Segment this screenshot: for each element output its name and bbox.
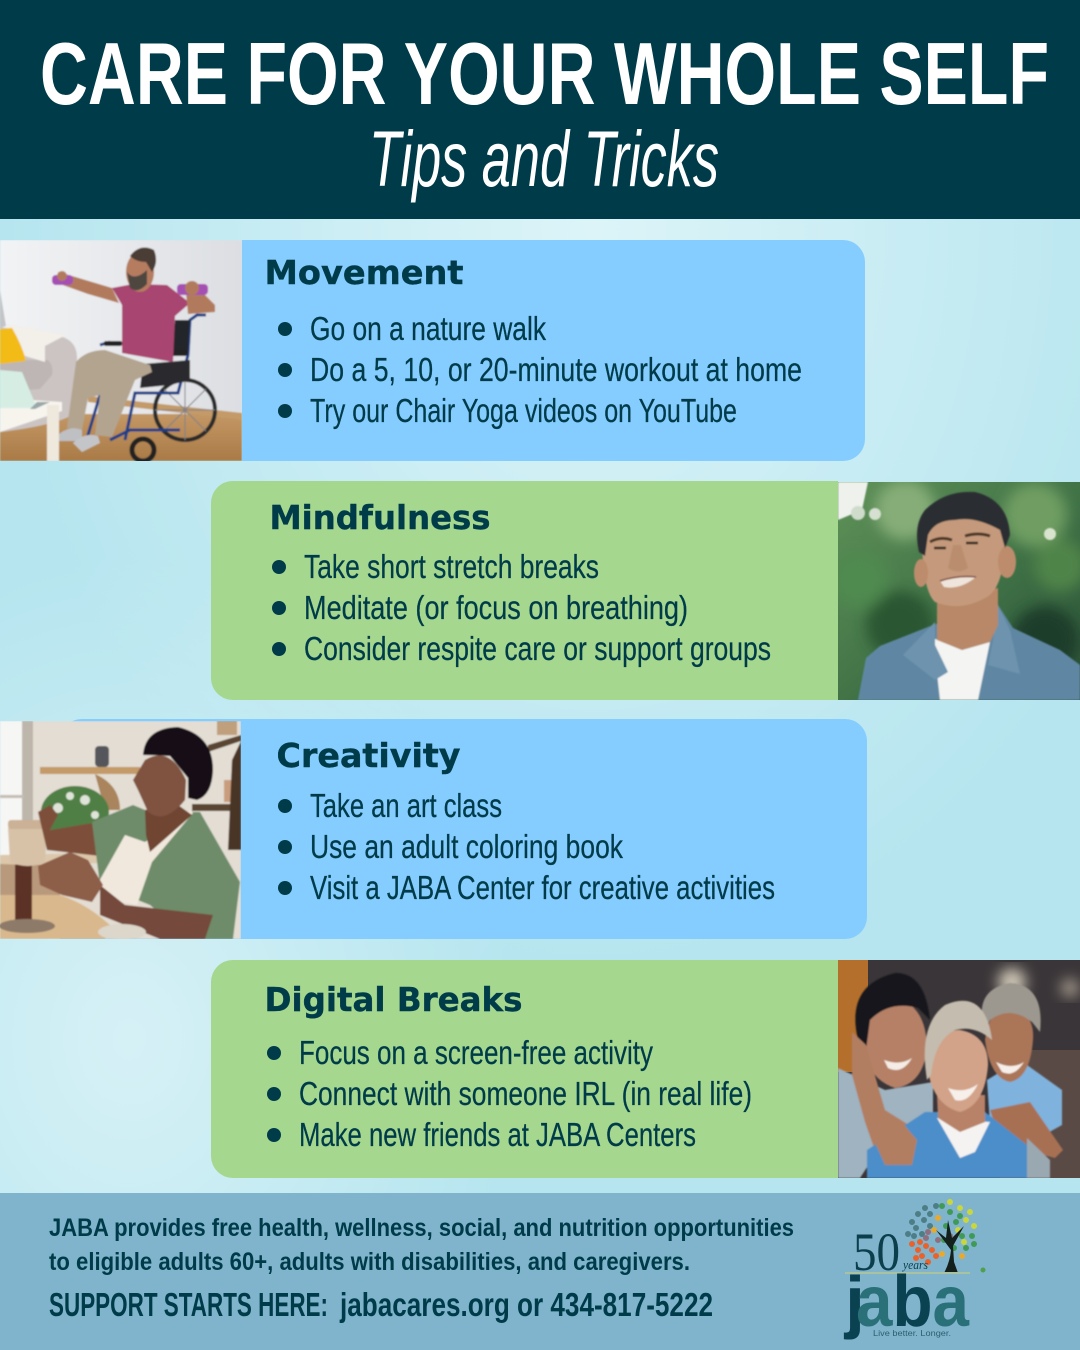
bench — [0, 895, 115, 939]
footer description: to eligible adults 60+, adults with disabilities, and caregivers. — [49, 1248, 690, 1276]
bullet list: Try our Chair Yoga videos on YouTube — [310, 392, 737, 429]
wordmark: jaba: aba — [856, 1262, 970, 1342]
contact line — [49, 1286, 713, 1323]
logo: JABA 50 years — [843, 1202, 986, 1342]
heading: Creativity — [276, 736, 460, 775]
footer description — [49, 1214, 794, 1276]
photo: three smiling women — [838, 960, 1080, 1178]
bullet list: Take an art class — [310, 787, 502, 824]
bullet list — [278, 310, 802, 429]
subtitle: Tips and Tricks — [369, 114, 719, 203]
right woman — [986, 1064, 1063, 1132]
apron — [97, 810, 193, 905]
arms — [58, 272, 119, 303]
bullet list: Go on a nature walk — [310, 310, 546, 347]
back arm and hand — [38, 805, 100, 856]
dumbbells — [52, 275, 73, 285]
heading: Mindfulness — [270, 498, 490, 537]
bullet list — [267, 1034, 752, 1153]
bullet list: Consider respite care or support groups — [304, 630, 771, 667]
bullet list: Visit a JABA Center for creative activities — [310, 869, 775, 906]
photo: smiling older man outdoors — [832, 480, 1080, 700]
sofa — [0, 327, 77, 432]
bullet list: Take short stretch breaks — [304, 548, 599, 585]
photo: man exercising in wheelchair — [0, 240, 242, 461]
left woman — [838, 1068, 933, 1178]
front hand — [38, 852, 103, 902]
plant — [41, 786, 109, 838]
bullet list — [272, 548, 771, 667]
panel: digital breaks — [211, 960, 1080, 1178]
bullet list: Use an adult coloring book — [310, 828, 623, 865]
panel: mindfulness — [211, 480, 1080, 700]
arm — [100, 885, 213, 939]
hair — [143, 727, 213, 800]
footer description: JABA provides free health, wellness, social, and nutrition opportunities — [49, 1214, 794, 1242]
panel: creativity — [0, 719, 867, 940]
shirt — [858, 605, 1080, 700]
trousers — [67, 350, 152, 437]
contact line: jabacares.org or 434-817-5222 — [339, 1286, 713, 1323]
contact line: SUPPORT STARTS HERE: — [49, 1286, 328, 1323]
bullet list — [278, 787, 775, 906]
header band — [0, 0, 1080, 219]
shirt — [92, 805, 240, 939]
neck and face — [145, 805, 192, 852]
table and laptop — [0, 398, 62, 432]
footer band — [0, 1193, 1080, 1350]
text: 50: 50 — [853, 1222, 900, 1282]
panel: movement — [0, 240, 865, 461]
neck — [937, 588, 998, 650]
head — [126, 252, 154, 292]
shirt — [112, 284, 190, 362]
bullet list: Do a 5, 10, or 20-minute workout at home — [310, 351, 802, 388]
bullet list: Focus on a screen-free activity — [299, 1034, 653, 1071]
icon: tree — [908, 1202, 986, 1273]
heading: Digital Breaks — [264, 980, 522, 1019]
wordmark: jaba: j — [843, 1262, 865, 1340]
face — [921, 518, 1006, 606]
tagline: Live better. Longer. — [873, 1329, 951, 1338]
heading: Movement — [264, 253, 464, 292]
bullet list: Connect with someone IRL (in real life) — [299, 1075, 752, 1112]
bullet list: Make new friends at JABA Centers — [299, 1116, 696, 1153]
centre woman — [867, 1112, 1027, 1178]
bullet list: Meditate (or focus on breathing) — [304, 589, 688, 626]
text: years: years — [901, 1257, 928, 1272]
wheelchair — [155, 380, 215, 440]
hand — [875, 1124, 918, 1166]
photo: woman doing pottery — [0, 721, 241, 940]
bowl — [8, 828, 47, 866]
